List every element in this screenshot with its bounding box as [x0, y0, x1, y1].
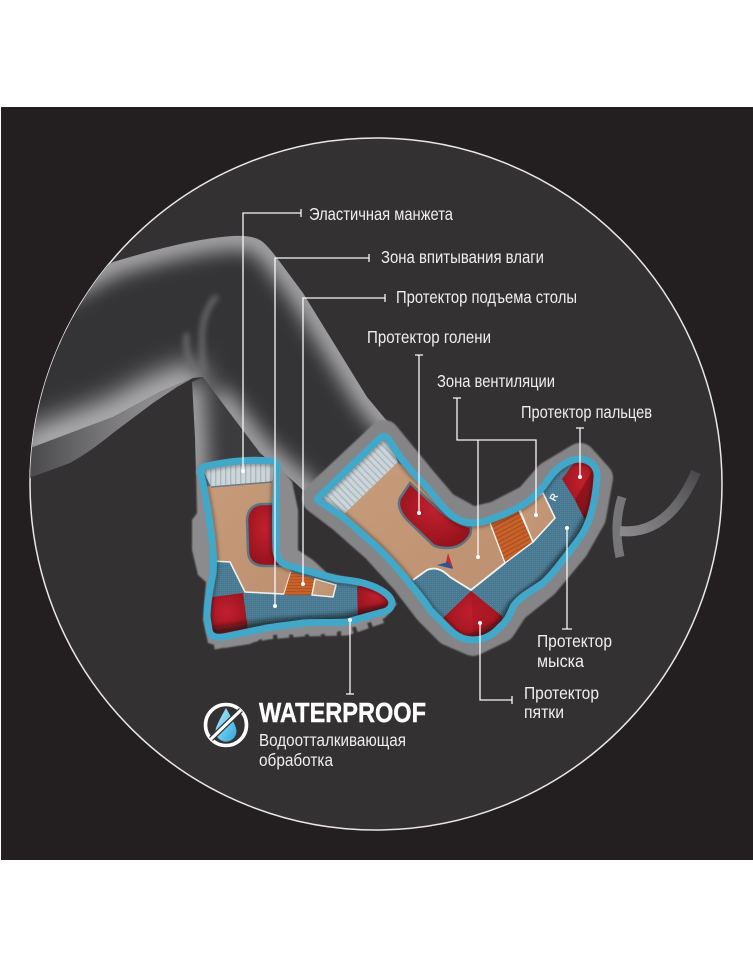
ghost: right sock halo: [318, 436, 597, 640]
loop stem: [617, 497, 622, 557]
label: toe cap protector: мыска: [537, 651, 584, 671]
label: ventilation: Зона вентиляции: [437, 371, 555, 391]
text: waterproof description: обработка: [259, 750, 333, 770]
icon: no water drop: [206, 704, 246, 746]
infographic: waterproof sock zones: [1, 107, 753, 860]
left sock: [195, 455, 400, 645]
foot: left: [204, 473, 360, 628]
label: moisture zone: Зона впитывания влаги: [381, 247, 544, 267]
right sock: [310, 430, 610, 650]
text: waterproof description: Водоотталкивающая: [259, 730, 406, 750]
ghost: left sock halo: [192, 462, 397, 648]
toe: left: [357, 586, 388, 616]
brand logo: [437, 553, 453, 569]
waterproof outline: right: [318, 436, 597, 640]
leader dots: [241, 469, 582, 625]
cuff: right: [322, 440, 398, 514]
ghost: front leg: [32, 236, 387, 492]
sole treads: left: [214, 619, 385, 646]
leg tan: right: [342, 462, 505, 590]
label: arch protector: Протектор подъема столы: [396, 287, 577, 307]
shin protector: right: [399, 483, 471, 548]
dark background panel: [1, 107, 753, 860]
leader lines: [243, 209, 584, 704]
heading: waterproof: WATERPROOF: [259, 697, 426, 728]
loop hook: [620, 472, 696, 531]
circle backdrop: [30, 138, 722, 830]
toe: right: [562, 462, 594, 520]
ghost: rear thigh band: [30, 378, 192, 478]
foot: right: [396, 456, 586, 620]
leg tan: left: [200, 480, 292, 593]
heel: left: [210, 593, 248, 634]
instep protector: right: [490, 508, 533, 563]
heel: right: [443, 591, 503, 636]
text: waterproof description: [259, 730, 406, 770]
waterproof outline: left: [201, 460, 392, 637]
label: toe cap protector: Протектор: [537, 631, 612, 651]
instep protector: left: [284, 572, 315, 595]
cuff: left: [204, 464, 274, 487]
ghost: rear shin: [192, 377, 300, 520]
label: heel protector: Протектор: [524, 683, 599, 703]
ventilation panel: left: [312, 579, 336, 597]
ghost: boot loop: [617, 472, 696, 557]
label: heel protector: пятки: [524, 702, 564, 722]
ghost: knee crease lines: [186, 296, 217, 372]
ghost legs silhouette: [30, 236, 614, 657]
label: shin protector: Протектор голени: [367, 327, 491, 347]
size mark R: R: [548, 491, 561, 503]
label: cuff: Эластичная манжета: [309, 204, 453, 224]
shin protector: left: [247, 504, 282, 566]
label: toe cap protector: [537, 631, 612, 671]
label: heel protector: [524, 683, 599, 722]
ventilation panel: right: [519, 493, 555, 542]
label: toe guard: Протектор пальцев: [521, 402, 652, 422]
